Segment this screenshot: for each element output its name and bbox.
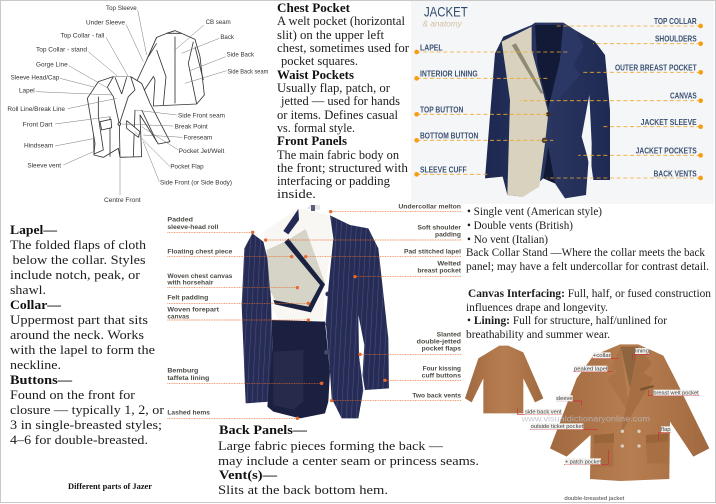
- panel: jacket anatomy photo: OUTER BREAST POCKET: [615, 63, 697, 73]
- text block: chest, waist and front panels: or items. Defines casual: [277, 108, 399, 122]
- diagram: labelled jacket line drawing: Break Point: [175, 123, 208, 130]
- panel: jacket anatomy photo: INTERIOR LINING: [420, 68, 478, 78]
- diagram: labelled jacket line drawing: Top Sleeve: [106, 5, 137, 12]
- diagram: labelled jacket line drawing: Side Front seam: [178, 113, 225, 120]
- text block: lapel, collar, buttons: 4–6 for double-breasted.: [10, 433, 148, 447]
- title: JACKET & anatomy: [423, 4, 468, 29]
- text block: vents, collar stand, canvas, lining: breathability and summer wear.: [466, 327, 610, 341]
- text block: chest, waist and front panels: [277, 1, 410, 201]
- panel: brown double-breasted jacket: [465, 344, 709, 502]
- diagram: labelled jacket line drawing: Pocket Flap: [170, 164, 204, 171]
- panel: pinstripe jacket construction: Felt padding: [167, 295, 208, 302]
- text block: lapel, collar, buttons: neckline.: [10, 358, 61, 372]
- watermark: www.visualdictionaryonline.com: [521, 415, 650, 424]
- text block: back panels and vents: Vent(s)—: [219, 468, 277, 482]
- diagram: labelled jacket line drawing: Foreseam: [184, 135, 212, 142]
- text block: lapel, collar, buttons: include notch, peak, or: [10, 268, 141, 282]
- text block: chest, waist and front panels: pocket squares.: [281, 54, 358, 68]
- panel: jacket anatomy photo: [411, 1, 714, 204]
- title: JACKET & anatomy: JACKET: [424, 4, 468, 20]
- text block: back panels and vents: Large fabric pieces forming the back —: [218, 439, 443, 453]
- panel: jacket anatomy photo: LAPEL: [420, 42, 443, 52]
- panel: pinstripe jacket construction: Floating chest piece: [167, 248, 233, 255]
- caption: different parts: Different parts of Jazer: [68, 482, 152, 491]
- panel: pinstripe jacket construction: canvas: [167, 313, 190, 320]
- panel: brown double-breasted jacket: outside ticket pocket: [531, 424, 584, 430]
- leader lines: [36, 10, 227, 195]
- text block: vents, collar stand, canvas, lining: • Double vents (British): [467, 218, 573, 232]
- icon: brown jacket front view: [550, 344, 709, 481]
- text block: back panels and vents: Slits at the back bottom hem.: [218, 483, 388, 497]
- panel: jacket anatomy photo: SHOULDERS: [655, 34, 697, 44]
- panel: jacket anatomy photo: BACK VENTS: [654, 168, 697, 178]
- icon: brown jacket back view: [465, 346, 543, 413]
- text block: chest, waist and front panels: the front; structured with: [277, 161, 409, 175]
- panel: pinstripe jacket construction: with horsehair: [166, 280, 214, 287]
- panel: pinstripe jacket construction: Soft shoulder: [417, 224, 462, 231]
- text block: chest, waist and front panels: Chest Pocket: [277, 1, 351, 15]
- diagram: labelled jacket line drawing: Roll Line/Break Line: [7, 106, 65, 113]
- panel: jacket anatomy photo: TOP BUTTON: [420, 105, 463, 115]
- text block: lapel, collar, buttons: Buttons—: [10, 373, 72, 387]
- panel: pinstripe jacket construction: Two back vents: [412, 393, 461, 400]
- diagram: labelled jacket line drawing: Centre Front: [104, 197, 141, 204]
- text block: vents, collar stand, canvas, lining: influences drape and longevity.: [466, 300, 608, 314]
- text block: back panels and vents: Back Panels—: [219, 423, 307, 437]
- text block: back panels and vents: may include a center seam or princess seams.: [218, 454, 479, 468]
- panel: brown double-breasted jacket: peaked lapel: [574, 366, 607, 372]
- panel: pinstripe jacket construction: Woven chest canvas: [167, 273, 233, 280]
- text block: vents, collar stand, canvas, lining: Canvas Interfacing: Full, half, or fused construction: [468, 286, 711, 300]
- panel: pinstripe jacket construction: padding: [435, 232, 461, 239]
- panel: pinstripe jacket construction: Lashed hems: [167, 410, 210, 417]
- text block: vents, collar stand, canvas, lining: • No vent (Italian): [467, 232, 548, 246]
- text block: chest, waist and front panels: Waist Pockets: [277, 68, 354, 82]
- icon: jacket back line art: [135, 31, 204, 106]
- diagram: labelled jacket line drawing: Lapel: [19, 87, 35, 94]
- panel: brown double-breasted jacket: lining: [635, 349, 649, 355]
- text block: chest, waist and front panels: Usually flap, patch, or: [277, 81, 391, 95]
- text block: chest, waist and front panels: jetted — used for hands: [280, 94, 400, 108]
- text block: chest, waist and front panels: slit) on the upper left: [277, 28, 385, 42]
- title: JACKET & anatomy: & anatomy: [423, 19, 462, 29]
- panel: pinstripe jacket construction: Welted: [437, 260, 461, 267]
- panel: pinstripe jacket construction: Four kissing: [423, 365, 461, 372]
- panel: pinstripe jacket construction: Pad stitched lapel: [404, 248, 461, 255]
- callout lines and dots: [167, 212, 461, 418]
- panel: brown double-breasted jacket: side back vent: [525, 410, 562, 416]
- text block: lapel, collar, buttons: The folded flaps of cloth: [10, 238, 147, 252]
- panel: brown double-breasted jacket: breast welt pocket: [653, 390, 699, 396]
- panel: pinstripe jacket construction: taffeta lining: [167, 375, 209, 382]
- panel: pinstripe jacket construction: Slanted: [437, 332, 461, 339]
- text block: back panels and vents: [218, 423, 479, 497]
- text block: vents, collar stand, canvas, lining: • Lining: Full for structure, half/unlined for: [467, 313, 667, 327]
- icon: pinstripe jacket cutaway: [242, 205, 389, 418]
- diagram: labelled jacket line drawing: [7, 5, 268, 204]
- text block: lapel, collar, buttons: Uppermost part that sits: [10, 313, 148, 327]
- callout lines: [517, 354, 699, 464]
- text block: lapel, collar, buttons: around the neck. Works: [10, 328, 144, 342]
- text block: vents, collar stand, canvas, lining: panel; may have a felt undercollar for contrast detail.: [466, 259, 709, 273]
- diagram: labelled jacket line drawing: Sleeve Head/Cap: [11, 74, 60, 81]
- panel: brown double-breasted jacket: +collar: [593, 353, 611, 359]
- panel: pinstripe jacket construction: Undercollar melton: [398, 203, 461, 210]
- text block: lapel, collar, buttons: below the collar. Styles: [12, 253, 146, 267]
- panel: pinstripe jacket construction: [166, 203, 462, 420]
- panel: jacket anatomy photo: SLEEVE CUFF: [420, 165, 467, 175]
- text block: lapel, collar, buttons: with the lapel to form the: [10, 343, 155, 357]
- panel: brown double-breasted jacket: flap: [661, 427, 671, 433]
- panel: pinstripe jacket construction: sleeve-head roll: [167, 224, 219, 231]
- panel: pinstripe jacket construction: cuff buttons: [422, 372, 462, 379]
- text block: chest, waist and front panels: The main fabric body on: [277, 148, 400, 162]
- text block: lapel, collar, buttons: closure — typically 1, 2, or: [10, 403, 165, 417]
- panel: jacket anatomy photo: TOP COLLAR: [654, 16, 697, 26]
- diagram: labelled jacket line drawing: Top Collar - stand: [36, 47, 87, 54]
- diagram: labelled jacket line drawing: Hindseam: [24, 143, 53, 150]
- text block: vents, collar stand, canvas, lining: Back Collar Stand —Where the collar meets the back: [466, 245, 705, 259]
- text block: chest, waist and front panels: inside.: [277, 187, 316, 201]
- text block: chest, waist and front panels: chest, sometimes used for: [277, 41, 410, 55]
- panel: pinstripe jacket construction: pocket flaps: [422, 346, 461, 353]
- diagram: labelled jacket line drawing: Side Back: [227, 51, 255, 58]
- panel: brown double-breasted jacket: + patch pocket: [565, 459, 601, 465]
- text block: lapel, collar, buttons: 3 in single-breasted styles;: [10, 418, 162, 432]
- diagram: labelled jacket line drawing: Under Sleeve: [86, 19, 125, 26]
- panel: pinstripe jacket construction: Padded: [167, 217, 193, 224]
- text block: lapel, collar, buttons: [10, 223, 165, 447]
- panel: pinstripe jacket construction: double-jetted: [417, 339, 461, 346]
- text block: chest, waist and front panels: Front Panels: [277, 134, 347, 148]
- diagram: labelled jacket line drawing: Gorge Line: [36, 61, 68, 68]
- text block: lapel, collar, buttons: Collar—: [10, 298, 61, 312]
- panel: jacket anatomy photo: CANVAS: [670, 91, 697, 101]
- text block: lapel, collar, buttons: Lapel—: [10, 223, 57, 237]
- diagram: labelled jacket line drawing: CB seam: [206, 19, 231, 26]
- panel: jacket anatomy photo: JACKET SLEEVE: [641, 117, 697, 127]
- caption: double-breasted jacket: double-breasted jacket: [564, 496, 625, 502]
- text block: vents, collar stand, canvas, lining: [466, 204, 711, 341]
- panel: jacket anatomy photo: JACKET POCKETS: [636, 146, 697, 156]
- callout lines and dots: [417, 26, 701, 178]
- diagram: labelled jacket line drawing: Pocket Jet/Welt: [179, 148, 225, 155]
- text block: vents, collar stand, canvas, lining: • Single vent (American style): [467, 204, 602, 218]
- diagram: labelled jacket line drawing: Sleeve vent: [27, 162, 61, 169]
- diagram: labelled jacket line drawing: Side Front (or Side Body): [160, 180, 232, 187]
- text block: lapel, collar, buttons: Found on the front for: [10, 388, 136, 402]
- diagram: labelled jacket line drawing: Front Dart: [23, 121, 53, 128]
- panel: pinstripe jacket construction: Bemburg: [167, 368, 198, 375]
- label tags: [525, 348, 699, 464]
- text block: chest, waist and front panels: vs. formal style.: [277, 121, 355, 135]
- text block: chest, waist and front panels: A welt pocket (horizontal: [277, 14, 405, 28]
- icon: jacket front line art: [87, 77, 170, 157]
- text block: lapel, collar, buttons: shawl.: [10, 283, 46, 297]
- diagram: labelled jacket line drawing: Side Back seam: [227, 68, 268, 75]
- text block: chest, waist and front panels: interfacing or padding: [277, 174, 391, 188]
- panel: pinstripe jacket construction: breast pocket: [417, 268, 462, 275]
- diagram: labelled jacket line drawing: Top Collar - fall: [60, 32, 104, 39]
- panel: pinstripe jacket construction: Woven forepart: [167, 306, 220, 313]
- panel: brown double-breasted jacket: sleeve: [556, 396, 573, 402]
- diagram: labelled jacket line drawing: Back: [220, 34, 235, 41]
- panel: jacket anatomy photo: BOTTOM BUTTON: [420, 131, 478, 141]
- icon: navy jacket with exposed canvas: [485, 23, 610, 198]
